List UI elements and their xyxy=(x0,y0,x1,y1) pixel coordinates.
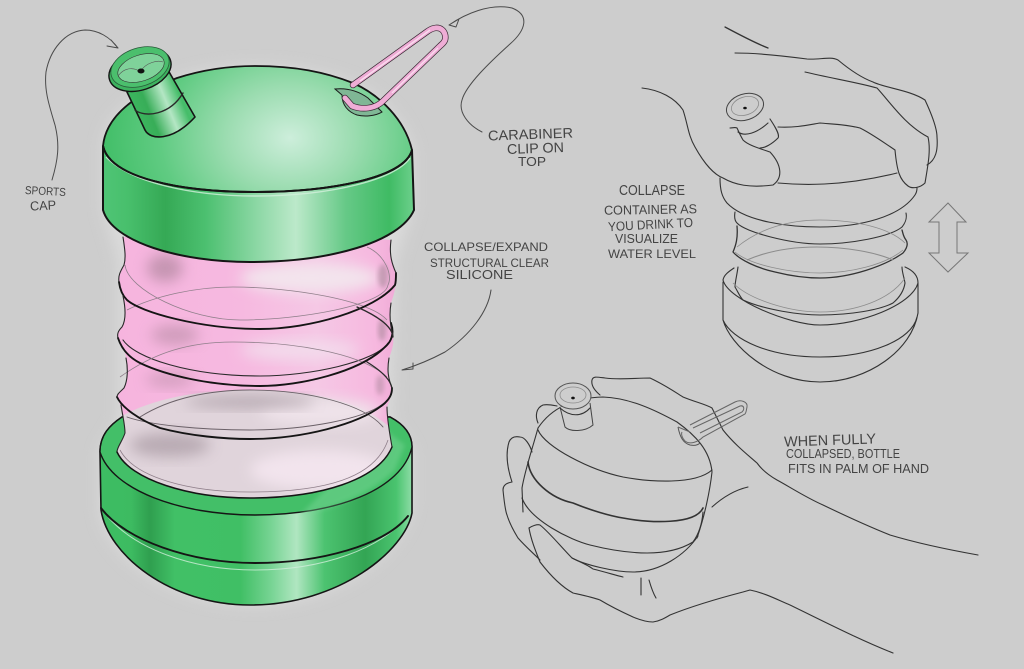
callout: carabiner clip: CLIP ON xyxy=(507,139,564,157)
thin back ellipses xyxy=(120,247,389,492)
small cap xyxy=(723,89,779,148)
callout: sports cap: SPORTS xyxy=(25,185,66,199)
callout: carabiner clip: TOP xyxy=(518,154,546,169)
top shell: dome and band xyxy=(103,66,414,262)
callout: collapse expand silicone: SILICONE xyxy=(446,268,513,282)
base: lower green shell xyxy=(100,417,412,605)
callout: sports cap: CAP xyxy=(30,197,56,214)
sports cap xyxy=(103,40,195,137)
clip on palm bottle xyxy=(678,401,747,445)
callout: carabiner clip xyxy=(449,7,573,169)
collapsed bottle in palm xyxy=(522,397,712,572)
silicone side outlines xyxy=(117,237,396,452)
note: fits in palm xyxy=(784,431,929,476)
callout: collapse expand silicone: COLLAPSE/EXPAND xyxy=(424,240,548,254)
note: fits in palm: COLLAPSED, BOTTLE xyxy=(786,446,900,461)
sketch: hand collapsing bottle xyxy=(642,27,968,382)
bold rings xyxy=(119,273,396,329)
hand outline xyxy=(642,27,937,188)
sketch: bottle in palm xyxy=(503,377,978,653)
note: collapse container: COLLAPSE xyxy=(619,183,685,199)
cap on palm bottle xyxy=(555,383,593,431)
palm and arm outline xyxy=(503,377,978,653)
ring back edges xyxy=(357,307,393,390)
up down arrow xyxy=(929,203,968,272)
callout: collapse expand silicone: STRUCTURAL CLEAR xyxy=(430,258,549,270)
note: fits in palm: FITS IN PALM OF HAND xyxy=(788,462,929,476)
callout: collapse expand silicone xyxy=(402,240,549,370)
note: fits in palm: WHEN FULLY xyxy=(784,431,877,451)
carabiner clip xyxy=(335,28,445,116)
main green and pink bottle xyxy=(100,28,445,605)
note: collapse container xyxy=(604,183,697,261)
note: collapse container: YOU DRINK TO xyxy=(608,215,693,234)
note: collapse container: WATER LEVEL xyxy=(608,247,696,261)
note: collapse container: VISUALIZE xyxy=(615,232,678,246)
silicone: collapsible clear section xyxy=(110,230,405,505)
soft highlight halo xyxy=(100,66,413,605)
note: collapse container: CONTAINER AS xyxy=(604,201,697,218)
callout: sports cap xyxy=(25,30,118,214)
callout: carabiner clip: CARABINER xyxy=(488,125,573,143)
collapsed bottle outline xyxy=(720,173,918,382)
